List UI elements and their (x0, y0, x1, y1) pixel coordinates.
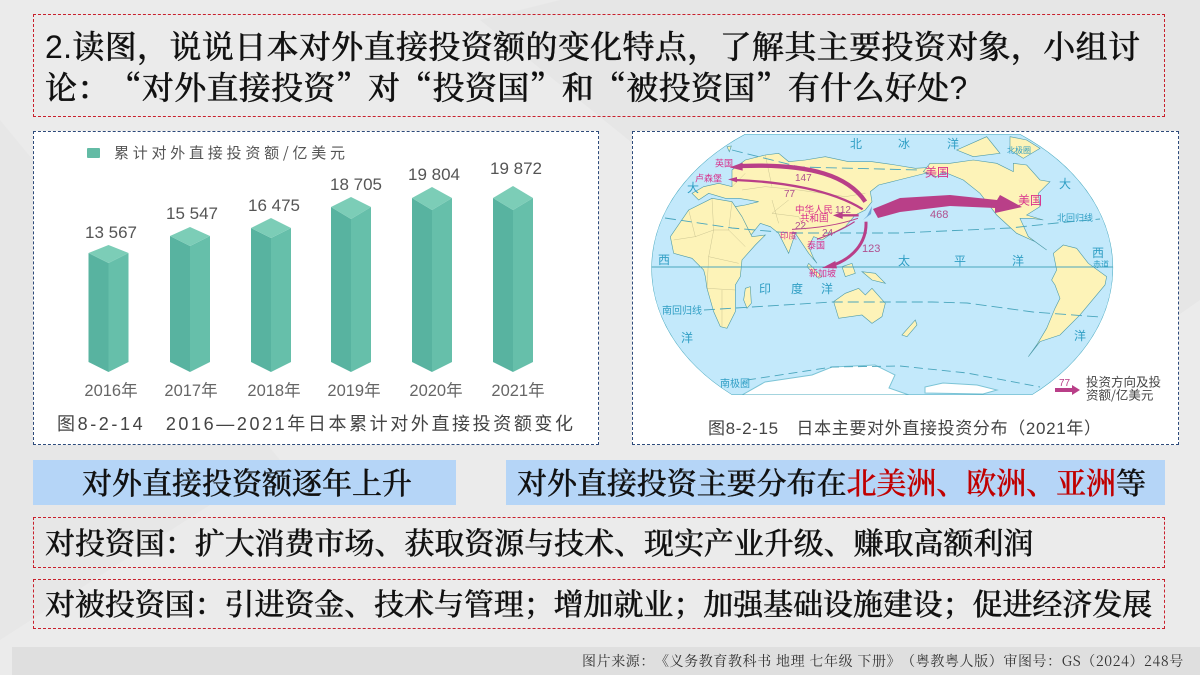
ocean labels: 西 (1092, 244, 1104, 261)
ocean labels: 大 (1059, 175, 1071, 192)
country borders (674, 155, 865, 327)
map values (784, 173, 948, 255)
map legend: 投资方向及投 (1086, 372, 1161, 390)
map labels (695, 156, 1042, 280)
ocean labels: 洋 (681, 329, 693, 346)
ocean labels: 北极圈 (1007, 145, 1031, 156)
ocean labels: 度 (791, 280, 803, 297)
Madagascar (744, 287, 751, 308)
map labels: 泰国 (807, 238, 825, 252)
year labels: 2020年 (409, 381, 463, 400)
year labels: 2018年 (247, 381, 301, 400)
ocean labels: 南极圈 (720, 375, 750, 390)
North America (923, 160, 1050, 250)
Africa (670, 198, 765, 328)
map outline (651, 134, 1113, 395)
Australia (834, 288, 885, 323)
New Zealand (902, 320, 917, 337)
panel: map (632, 131, 1179, 445)
arrow: to India (792, 218, 858, 229)
year labels: 2019年 (327, 381, 381, 400)
map labels: 新加坡 (809, 266, 836, 280)
year labels: 2017年 (164, 381, 218, 400)
map labels: 美国 (925, 164, 949, 180)
arrow: to USA 468 (873, 195, 1022, 218)
ocean labels: 赤道 (1093, 259, 1109, 270)
legend: 累计对外直接投资额/亿美元 (114, 142, 345, 163)
ocean labels: 印 (759, 280, 771, 297)
bar 2016 (85, 223, 137, 372)
map values: 112 (835, 205, 851, 216)
ocean labels: 西 (658, 251, 670, 268)
year labels: 2021年 (491, 381, 545, 400)
map values: 147 (795, 173, 812, 184)
Arctic islands (957, 137, 1000, 157)
text box: benefits to investing country: 对投资国：扩大消费市场、获取资源与技术、现实产业升级、赚取高额利润 (45, 519, 1033, 563)
title line 2: 论：“对外直接投资”对“投资国”和“被投资国”有什么好处? (45, 63, 968, 109)
map labels: 美国 (1018, 192, 1042, 208)
map labels: 卢森堡 (695, 172, 722, 184)
text box: benefits to host country: 对被投资国：引进资金、技术与管理；增加就业；加强基础设施建设；促进经济发展 (45, 580, 1152, 624)
bar 2018 (248, 196, 300, 372)
bar 2018: 16 475 (248, 196, 300, 215)
year labels: 2016年 (84, 381, 138, 400)
Eurasia (692, 153, 959, 263)
panel: bar chart (33, 131, 599, 445)
ocean labels (658, 135, 1109, 390)
map labels: 印度 (780, 230, 798, 242)
graticule lines (640, 150, 1120, 387)
ocean labels: 北 (850, 135, 862, 152)
map labels: 共和国 (800, 210, 829, 224)
map values: 468 (930, 209, 948, 221)
map labels: 英国 (715, 156, 733, 170)
Greenland (1010, 137, 1040, 158)
bar 2020: 19 804 (408, 165, 460, 184)
ocean labels: 太 (898, 252, 910, 269)
year labels (84, 381, 545, 400)
ocean labels: 北回归线 (1057, 211, 1093, 224)
ocean labels: 洋 (1074, 327, 1086, 344)
ocean labels: 洋 (1012, 252, 1024, 269)
bar 2019 (330, 175, 382, 372)
title box (33, 14, 1165, 117)
map values: 22 (795, 221, 807, 232)
map legend (1055, 372, 1161, 404)
New Guinea and islands (807, 263, 885, 283)
arrow: to UK (742, 166, 865, 202)
ocean labels: 平 (954, 252, 966, 269)
bar 2017: 15 547 (166, 204, 218, 223)
arrow: to Thailand (817, 222, 855, 239)
callout: investment distribution: 对外直接投资主要分布在北美洲、欧洲、亚洲等 (517, 459, 1146, 503)
bar 2016: 13 567 (85, 223, 137, 242)
map labels: 中华人民 (795, 202, 833, 216)
arrow: to Luxembourg (735, 180, 863, 209)
map values: 24 (822, 228, 834, 239)
arrow: to China (842, 212, 859, 219)
map caption: 图8-2-15 日本主要对外直接投资分布（2021年） (708, 419, 1101, 438)
ocean labels: 冰 (898, 135, 910, 152)
title line 1: 2.读图，说说日本对外直接投资额的变化特点，了解其主要投资对象，小组讨 (45, 22, 1140, 68)
bar 2021 (490, 159, 542, 372)
map legend: 77 (1059, 378, 1071, 389)
bar 2017 (166, 204, 218, 372)
map values: 123 (862, 243, 880, 255)
British Isles (727, 146, 731, 152)
investment arrows (728, 163, 866, 268)
world map (640, 130, 1130, 400)
South America (1028, 245, 1107, 357)
ocean labels: 南回归线 (662, 302, 702, 317)
map legend: 资额/亿美元 (1086, 384, 1153, 404)
Antarctica (742, 365, 997, 395)
ocean labels: 洋 (821, 280, 833, 297)
chart caption: 图8-2-14 2016—2021年日本累计对外直接投资额变化 (57, 414, 573, 434)
map values: 77 (784, 189, 796, 200)
Japan (863, 206, 872, 220)
callout: investment trend: 对外直接投资额逐年上升 (82, 459, 412, 503)
arrow: to Singapore (834, 222, 866, 265)
bar 2021: 19 872 (490, 159, 542, 178)
source note: 图片来源：《义务教育教科书 地理 七年级 下册》（粤教粤人版）审图号：GS（2024）248号 (582, 651, 1184, 671)
ocean labels: 洋 (947, 135, 959, 152)
bar 2020 (408, 165, 460, 372)
bar 2019: 18 705 (330, 175, 382, 194)
ocean labels: 大 (687, 179, 699, 196)
